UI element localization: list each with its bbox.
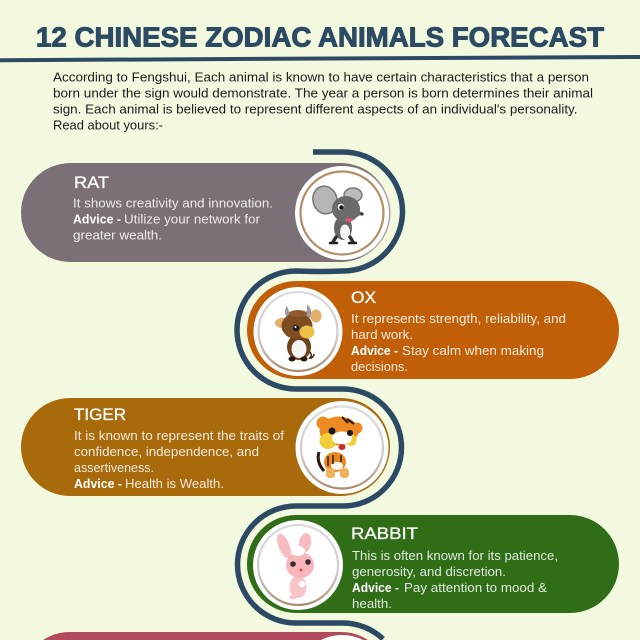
panel: rat	[21, 163, 390, 262]
rat text: It shows creativity and innovation.	[73, 196, 273, 210]
tiger heading: TIGER	[74, 406, 126, 424]
panel: rabbit	[247, 515, 619, 613]
rat medallion	[295, 166, 390, 260]
ox pill background	[247, 281, 619, 379]
rat text	[73, 196, 273, 242]
ox text: Stay calm when making	[402, 344, 544, 358]
panel: tiger	[21, 398, 390, 496]
rabbit text: health.	[352, 597, 392, 611]
icon: tiger	[316, 416, 362, 478]
intro paragraph: Read about yours:-	[53, 118, 163, 132]
tiger text: Health is Wealth.	[125, 477, 224, 491]
rat text: greater wealth.	[73, 228, 162, 242]
icon: ox	[275, 304, 322, 362]
ox text	[351, 312, 566, 374]
intro paragraph: According to Fengshui, Each animal is known to have certain characteristics that a person	[53, 70, 589, 84]
rat pill background	[21, 163, 390, 262]
rabbit text: Pay attention to mood &	[404, 581, 548, 595]
tiger text: assertiveness.	[74, 461, 154, 475]
rat heading: RAT	[74, 174, 109, 192]
tiger text: It is known to represent the traits of	[74, 429, 285, 443]
icon: rabbit	[274, 532, 314, 600]
rabbit text: generosity, and discretion.	[352, 565, 506, 579]
rat text: Advice -	[73, 212, 121, 226]
tiger text	[74, 429, 285, 491]
intro paragraph: sign. Each animal is believed to represent different aspects of an individual's personality.	[53, 102, 578, 116]
panel: ox	[247, 281, 619, 379]
connector: winding path	[237, 152, 402, 639]
rabbit text: Advice -	[352, 581, 399, 595]
intro paragraph: born under the sign would demonstrate. The year a person is born determines their animal	[53, 86, 593, 100]
rabbit medallion	[253, 520, 343, 610]
ox text: decisions.	[351, 360, 408, 374]
rabbit heading: RABBIT	[351, 525, 418, 543]
rat text: Utilize your network for	[124, 212, 260, 226]
ox heading: OX	[351, 289, 376, 307]
rabbit pill background	[247, 515, 619, 613]
ox medallion	[254, 287, 342, 376]
rabbit text	[352, 549, 558, 611]
ox text: It represents strength, reliability, and	[351, 312, 566, 326]
medallion	[321, 635, 363, 640]
ox text: Advice -	[351, 344, 398, 358]
tiger pill background	[21, 398, 390, 496]
pill background	[43, 632, 368, 640]
ox text: hard work.	[351, 328, 413, 342]
intro paragraph	[53, 70, 593, 132]
tiger medallion	[296, 401, 388, 494]
panel: next animal, cropped at the bottom edge	[43, 632, 368, 640]
icon: rat	[310, 183, 364, 243]
title: 12 CHINESE ZODIAC ANIMALS FORECAST	[36, 22, 604, 52]
rabbit text: This is often known for its patience,	[352, 549, 558, 563]
tiger text: confidence, independence, and	[74, 445, 259, 459]
tiger text: Advice -	[74, 477, 122, 491]
title underline	[0, 57, 640, 60]
